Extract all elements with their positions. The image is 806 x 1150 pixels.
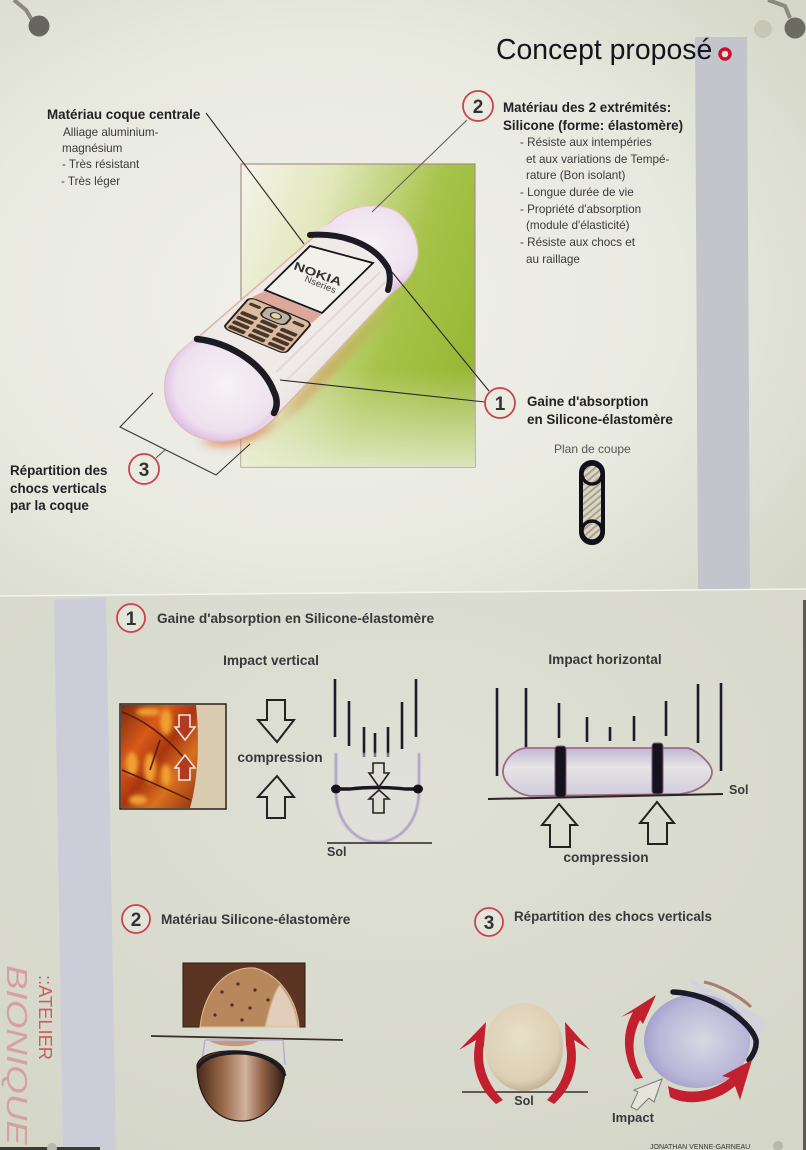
text block: central shell material: Alliage aluminium- [63,126,159,139]
red arrow right [547,1022,590,1104]
logo: atelier bionique [0,965,55,1146]
callout number 2 [463,91,493,121]
text block: shock distribution: par la coque [10,498,89,513]
section heading 3: Répartition des chocs verticals [514,909,712,924]
section heading 2 [122,905,351,933]
phone brand: Nseries [303,274,338,295]
sheath band left [555,746,566,797]
text block: shock distribution: Répartition des [10,463,107,478]
text block: ends material [503,100,683,266]
impact arrow [631,1079,662,1110]
capsule end: bottom [165,339,276,441]
pin: top left [14,0,50,36]
text block: central shell material: - Très léger [61,175,120,188]
phone keypad [223,297,312,354]
capsule side view [503,748,712,796]
callout number 3 [129,449,166,484]
label: ground: Sol [514,1094,534,1108]
phone brand: NOKIA [292,261,343,289]
sheath band [198,1053,285,1076]
label: impact: Impact [612,1110,655,1125]
phone brand [292,261,343,295]
leader lines [206,113,489,402]
section heading 3 [475,908,712,936]
callout number 1 [485,388,515,418]
panel: horizontal impact [488,652,748,865]
label: compression: compression [237,750,323,765]
text block: absorption sheath: en Silicone-élastomère [527,412,673,427]
text block: ends material: (module d'élasticité) [526,219,630,232]
red arrow left [621,995,656,1079]
text block: absorption sheath [527,394,673,427]
small arrows [369,763,389,787]
phone screen [265,246,373,313]
heading: Impact vertical [223,653,319,668]
section heading 2: 2 [131,910,141,931]
section label: Plan de coupe [554,442,631,456]
ground line [488,794,723,799]
text block: ends material: Matériau des 2 extrémités: [503,100,671,115]
background: lower sheet [0,589,806,1150]
ground line [327,842,432,844]
photo: textured skin [183,963,305,1027]
pin: top right [754,0,806,38]
text block: ends material: au raillage [526,253,580,266]
green backdrop [241,164,475,467]
capsule dome photo [197,1051,285,1121]
text block: ends material: et aux variations de Tempé- [526,153,669,166]
sheath band [673,992,756,1060]
red arrow bottom [668,1060,752,1102]
photo: muscle tissue [120,704,226,809]
panel: capsule shock distribution [612,978,766,1125]
arrow: compression down [258,700,294,742]
arrow: compression up [258,776,294,818]
lavender band: lower sheet [54,597,116,1150]
sheath band right [652,743,663,794]
ground line [462,1091,588,1093]
text block: central shell material: magnésium [62,142,122,155]
text block: shock distribution: chocs verticals [10,481,107,496]
arrow: compression right [640,802,674,844]
impact lines [335,679,416,757]
bottom edge and pins [0,600,806,1150]
label: ground: Sol [327,845,346,859]
label: compression: compression [563,850,649,865]
text block: ends material: - Résiste aux chocs et [520,236,636,249]
body ribs [276,272,385,382]
section heading 1 [117,604,434,632]
title: Concept proposé [496,34,712,66]
red arrow left [459,1022,503,1104]
text block: ends material: Silicone (forme: élastomère) [503,118,683,133]
text block: shock distribution [10,463,107,513]
panel: silicone material [151,963,343,1121]
lavender band: upper sheet [695,37,750,590]
section heading 1: 1 [126,609,137,630]
purple sphere [644,994,750,1088]
absorption band: bottom [197,339,277,413]
background: upper sheet [0,0,806,596]
capsule end: top [308,206,418,292]
faint capsule outline [202,1040,285,1065]
egg [485,1003,563,1091]
capsule end view [336,753,419,842]
callout number 3: 3 [139,460,149,481]
panel: vertical impact [120,653,432,859]
impact lines [497,683,721,776]
section heading 3: 3 [484,913,494,934]
text block: central shell material [47,107,200,188]
phone concept illustration [165,206,420,445]
section heading 2: Matériau Silicone-élastomère [161,912,351,927]
text block: ends material: - Propriété d'absorption [520,203,641,216]
cross-section icon [581,462,603,543]
panel: egg shock distribution [459,1003,590,1108]
text block: central shell material: Matériau coque centrale [47,107,200,122]
faint capsule [689,978,766,1050]
section heading 1: Gaine d'absorption en Silicone-élastomère [157,611,434,626]
arrow: compression left [542,804,577,847]
text block: ends material: - Résiste aux intempéries [520,136,652,149]
text block: ends material: rature (Bon isolant) [526,169,625,182]
icon: title red ring [720,49,730,59]
ground line [151,1036,343,1040]
label: ground: Sol [729,783,748,797]
text block: ends material: - Longue durée de vie [520,186,634,199]
callout number 2: 2 [473,97,483,118]
bracket: shock distribution [120,393,250,475]
text block: absorption sheath: Gaine d'absorption [527,394,648,409]
text block: central shell material: - Très résistant [62,158,140,171]
absorption band: top [310,235,390,290]
logo: atelier bionique: ::ATELIER [35,975,55,1060]
sheath band [337,788,418,789]
heading: Impact horizontal [548,652,662,667]
callout number 1: 1 [495,394,506,415]
capsule body [165,206,418,441]
logo: atelier bionique: BIONIQUE [0,965,32,1146]
